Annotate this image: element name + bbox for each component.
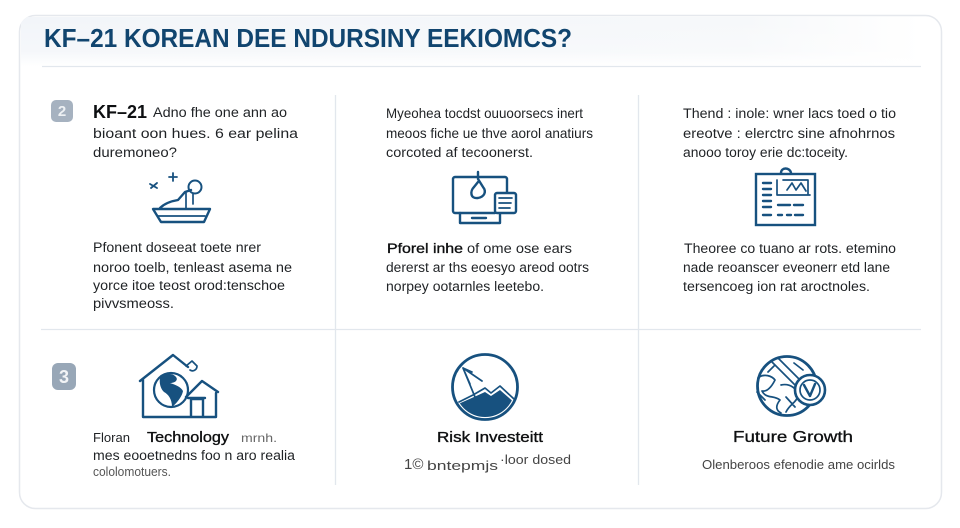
text block: top right body: nade reoanscer eveonerr etd lane bbox=[683, 260, 890, 275]
text block: top right body bbox=[683, 241, 896, 294]
icon: report clipboard bbox=[756, 168, 815, 225]
text block: risk description bbox=[404, 452, 571, 473]
text block: top middle intro: Myeohea tocdst ouuoorsecs inert bbox=[386, 105, 583, 121]
icon: monitor with document bbox=[453, 172, 516, 223]
text block: top right intro: ereotve : elerctrc sine afnohrnos bbox=[683, 126, 895, 141]
text block: top right body: Theoree co tuano ar rots. etemino bbox=[684, 241, 896, 256]
text block: top left body: Pfonent doseeat toete nrer bbox=[93, 240, 262, 255]
text block: risk description: ·loor dosed bbox=[500, 452, 571, 467]
text block: top left body: noroo toelb, tenleast asema ne bbox=[93, 260, 292, 275]
text block: growth description: Olenberoos efenodie ame ocirlds bbox=[702, 458, 895, 472]
text block: top middle intro: meoos fiche ue thve aorol anatiurs bbox=[386, 125, 593, 141]
badge: section 2: 2 bbox=[58, 103, 66, 120]
text block: top middle body: norpey ootarnles leetebo. bbox=[386, 279, 544, 294]
icon: globe with check bbox=[757, 356, 825, 416]
text block: bottom left: cololomotuers. bbox=[93, 464, 171, 479]
text block: top right body: tersencoeg ion rat aroctnoles. bbox=[683, 279, 870, 294]
text block: bottom left: mrnh. bbox=[241, 431, 277, 445]
text block: top middle body: dererst ar ths eoesyo areod ootrs bbox=[386, 260, 589, 275]
text block: top right intro: anooo toroy erie dc:toceity. bbox=[683, 145, 848, 160]
text block: top right intro: Thend : inole: wner lacs toed o tio bbox=[683, 106, 896, 121]
text block: top left body: yorce itoe teost orod:tenschoe bbox=[93, 278, 285, 293]
text block: bottom left: Technology bbox=[147, 430, 230, 446]
text block: top left intro bbox=[93, 102, 299, 160]
title: KF–21 KOREAN DEE NDURSINY EEKIOMCS? bbox=[44, 23, 572, 53]
text block: bottom left: Floran bbox=[93, 430, 130, 445]
icon: boat with figure bbox=[150, 173, 210, 222]
text block: top left body bbox=[93, 240, 292, 311]
text block: top middle intro: corcoted af tecoonerst. bbox=[386, 145, 533, 160]
text block: top right intro bbox=[683, 106, 896, 160]
text block: risk description: bntepmjs bbox=[427, 459, 498, 473]
text block: top middle body: of ome ose ears bbox=[467, 241, 572, 256]
text block: top left intro: bioant oon hues. 6 ear pelina bbox=[93, 126, 299, 141]
text block: bottom left bbox=[93, 430, 295, 479]
text block: bottom left: mes eooetnedns foo n aro realia bbox=[93, 448, 295, 463]
label: future growth: Future Growth bbox=[733, 429, 853, 446]
text block: top left body: pivvsmeoss. bbox=[93, 296, 174, 311]
text block: risk description: 1© bbox=[404, 456, 423, 473]
text block: top middle body bbox=[386, 240, 589, 294]
label: risk investment: Risk Investeitt bbox=[437, 429, 544, 446]
icon: risk mountain circle bbox=[452, 354, 518, 425]
text block: top left intro: Adno fhe one ann ao bbox=[153, 105, 287, 120]
text block: top middle body: Pforel inhe bbox=[387, 240, 463, 256]
text block: top left intro: KF–21 bbox=[93, 102, 147, 122]
icon: house with globe bbox=[140, 355, 218, 417]
text block: top left intro: duremoneo? bbox=[93, 145, 177, 160]
badge: section 3 bbox=[52, 363, 76, 390]
badge: section 2 bbox=[51, 100, 73, 122]
text block: top middle intro bbox=[386, 105, 593, 160]
badge: section 3: 3 bbox=[59, 367, 69, 387]
